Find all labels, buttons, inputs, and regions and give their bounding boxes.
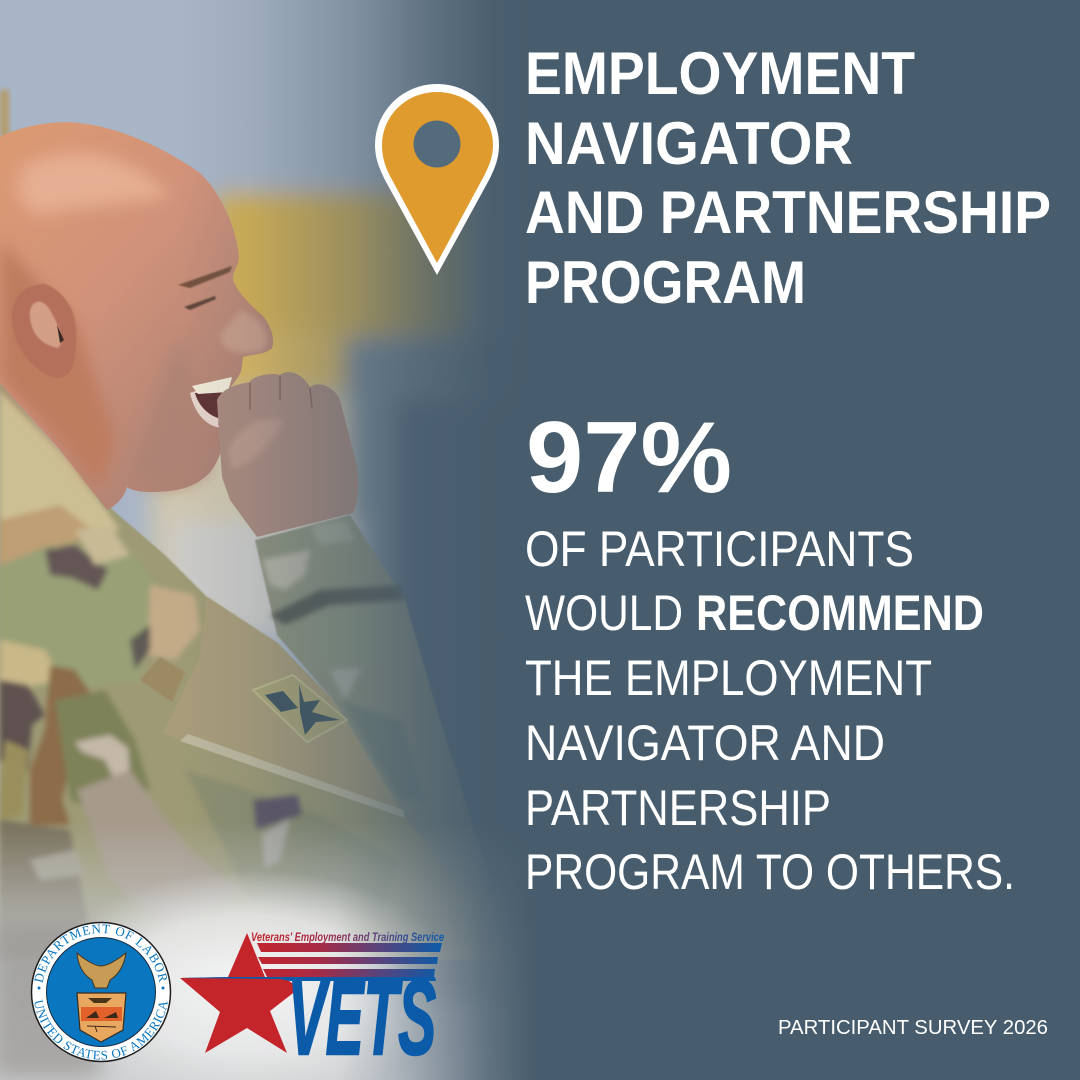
hand	[217, 372, 358, 537]
survey source note: PARTICIPANT SURVEY 2026	[778, 1017, 1048, 1039]
logo: Department of Labor seal	[30, 922, 172, 1062]
seal shield	[77, 993, 126, 1042]
soldier neck and head	[0, 122, 273, 510]
logo: Department of Labor seal: DEPARTMENT OF LABOR	[34, 924, 167, 983]
title: NAVIGATOR	[525, 110, 853, 177]
white fade at bottom	[0, 832, 520, 1080]
statistic description	[525, 521, 1015, 900]
statistic description: PARTNERSHIP	[525, 780, 831, 836]
unit patch	[253, 675, 347, 742]
title	[525, 40, 1051, 316]
cuff camouflage	[262, 550, 310, 590]
eyebrow and closed eye	[178, 266, 232, 288]
mouth and teeth	[190, 378, 232, 428]
shoulder velcro panel	[163, 597, 405, 817]
big statistic: 97%: 97%	[526, 402, 732, 514]
horizontal blend to slate panel	[180, 0, 530, 1080]
title: EMPLOYMENT	[525, 40, 915, 107]
logo: VETS	[180, 932, 444, 1077]
icon: location pin	[375, 84, 499, 275]
logo: VETS: Veterans' Employment and Training Service	[251, 932, 444, 944]
statistic description: OF PARTICIPANTS	[525, 521, 914, 577]
statistic description: THE EMPLOYMENT	[525, 650, 932, 706]
logo: VETS: VETS	[288, 959, 436, 1077]
statistic description: WOULD	[525, 585, 683, 641]
statistic description: NAVIGATOR AND	[525, 715, 885, 771]
statistic description: RECOMMEND	[696, 585, 984, 641]
soldier uniform	[0, 383, 500, 960]
ear	[12, 284, 76, 378]
logo: Department of Labor seal: UNITED STATES OF AMERICA	[34, 999, 168, 1060]
title: PROGRAM	[525, 249, 806, 316]
seal eagle	[77, 953, 126, 988]
panel: photo of laughing soldier	[0, 0, 522, 1080]
